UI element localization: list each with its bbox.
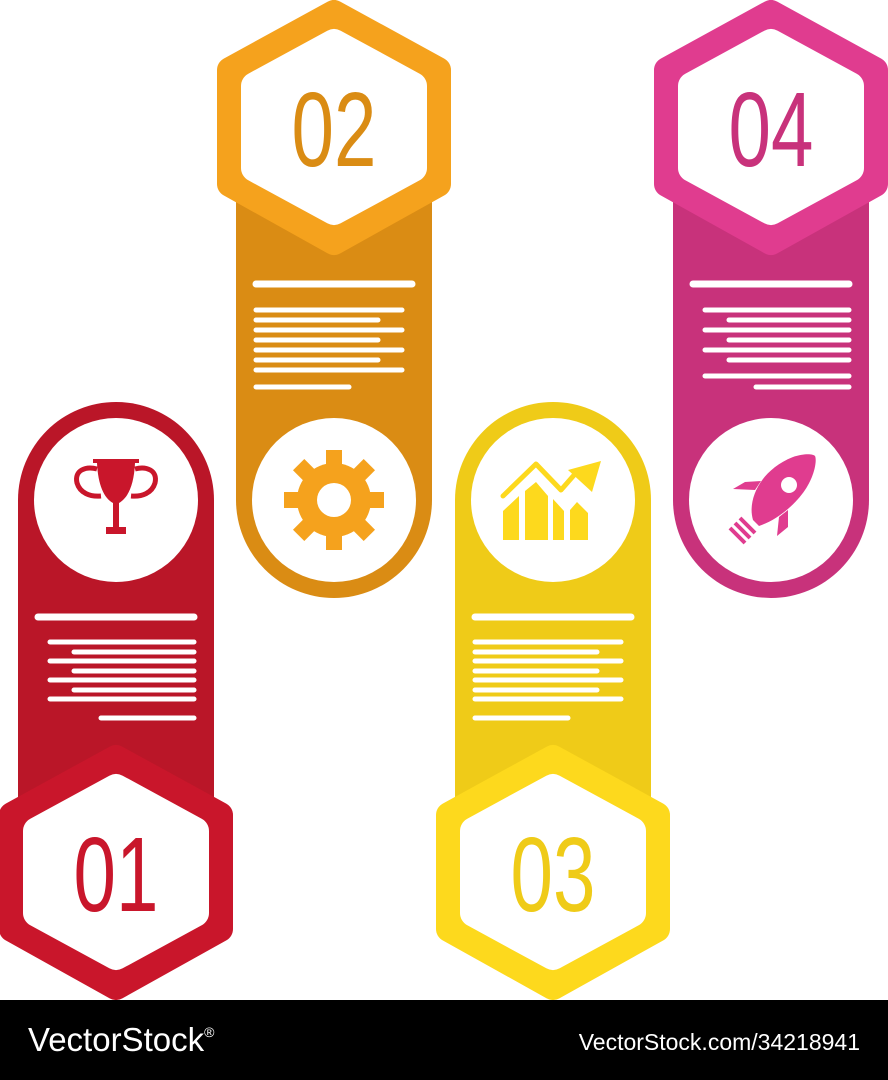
panel: step 01 (red) — [12, 402, 220, 987]
text block 02 — [256, 284, 412, 387]
hexagon: 03: 03 — [511, 815, 595, 934]
hexagon: 03 — [449, 758, 657, 987]
panel: step 04 (pink) — [667, 13, 875, 598]
hexagon: 01: 01 — [74, 815, 158, 934]
footer bar: VectorStock.com/34218941 — [579, 1029, 860, 1055]
hexagon: 04: 04 — [729, 70, 813, 189]
icon circle: rocket — [689, 418, 853, 582]
text block 03 — [475, 617, 631, 718]
footer bar — [0, 1000, 888, 1080]
hexagon: 04 — [667, 13, 875, 242]
icon circle: growth chart — [471, 418, 635, 582]
icon circle: gear — [252, 418, 416, 582]
icon circle: trophy — [34, 418, 198, 582]
text block 04 — [693, 284, 849, 387]
hexagon: 02 — [230, 13, 438, 242]
footer bar: VectorStock — [28, 1021, 204, 1058]
text block 01 — [38, 617, 194, 718]
panel: step 02 (orange) — [230, 13, 438, 598]
footer bar: ® — [204, 1024, 215, 1040]
hexagon: 01 — [12, 758, 220, 987]
panel: step 03 (yellow) — [449, 402, 657, 987]
hexagon: 02: 02 — [292, 70, 376, 189]
